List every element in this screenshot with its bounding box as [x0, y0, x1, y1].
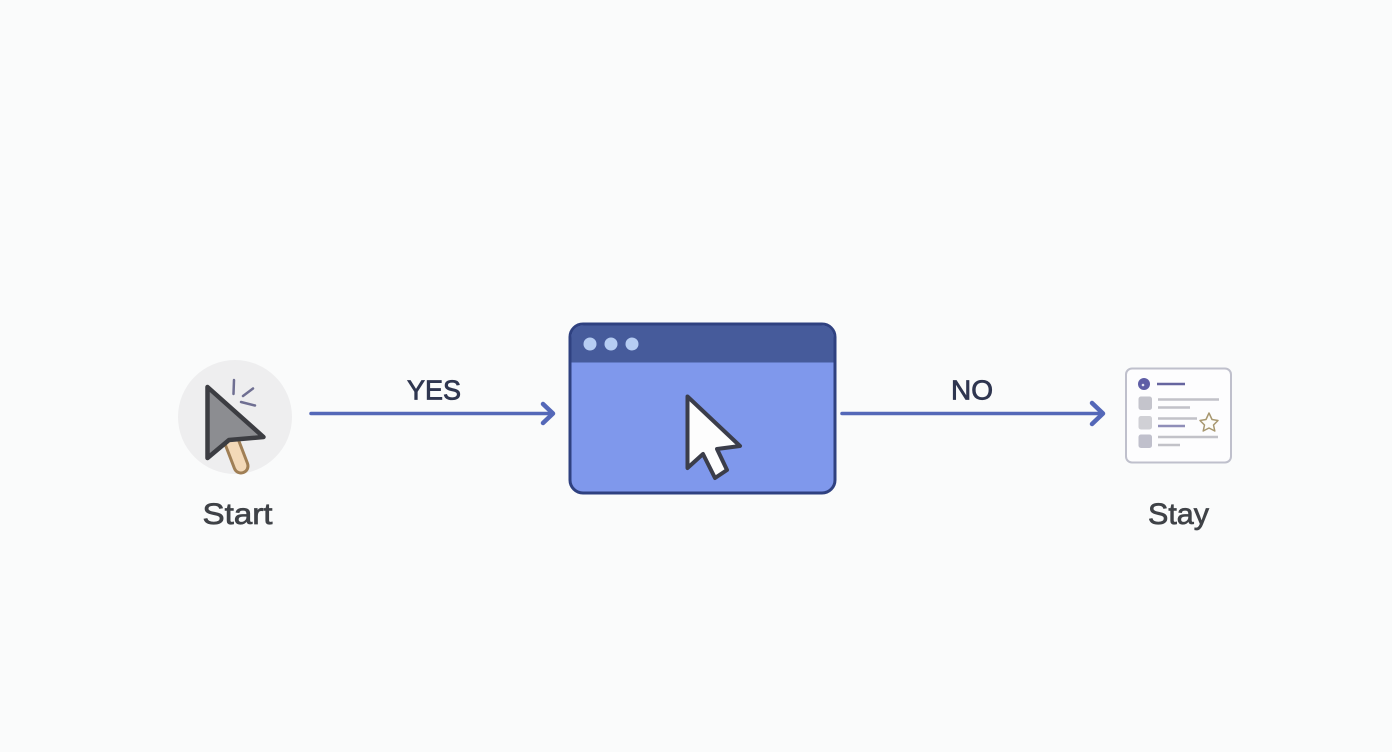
icon: window dots	[584, 338, 638, 350]
label: YES: YES	[407, 374, 461, 406]
label: Start: Start	[202, 498, 273, 531]
icon: cursor handle	[231, 440, 241, 466]
label: Stay: Stay	[1148, 498, 1209, 531]
icon: start cursor	[178, 360, 292, 474]
label: NO: NO	[951, 374, 993, 406]
icon: white cursor	[688, 396, 740, 478]
icon: cursor arrowhead	[208, 387, 264, 458]
arrow: no	[842, 403, 1103, 424]
icon: star	[1200, 413, 1218, 431]
icon: stay page list	[1126, 368, 1231, 462]
icon: click sparks	[234, 380, 255, 406]
arrow: yes	[311, 404, 553, 423]
panel: browser window	[570, 324, 835, 493]
